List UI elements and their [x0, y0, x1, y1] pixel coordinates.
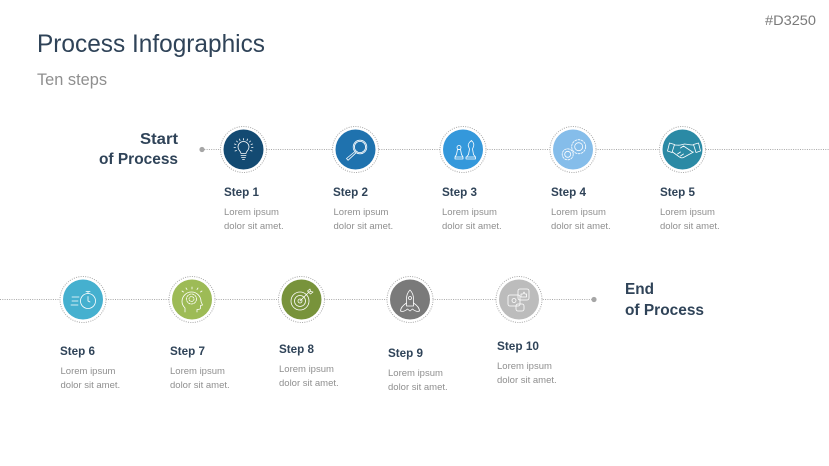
icon: light bulb	[234, 138, 253, 160]
step 1 text	[224, 207, 284, 232]
step 10	[496, 276, 557, 386]
heading: start of process	[99, 131, 179, 168]
heading: end of process: End	[625, 281, 654, 298]
step 8 text: Lorem ipsum	[279, 364, 334, 375]
step 5 text	[660, 207, 720, 232]
step 3 label: Step 3	[442, 185, 477, 199]
step 2 label: Step 2	[333, 185, 368, 199]
step 5	[660, 126, 720, 232]
step 7 text: dolor sit amet.	[170, 380, 230, 391]
step 5 label: Step 5	[660, 185, 695, 199]
step 9 text: Lorem ipsum	[388, 368, 443, 379]
step 8	[278, 276, 339, 389]
timeline: first row	[199, 147, 829, 152]
step 6 text	[60, 366, 120, 391]
step 3 text	[442, 207, 502, 232]
title: Process Infographics	[37, 30, 265, 58]
heading: start of process: of Process	[99, 151, 178, 168]
step 3 text: dolor sit amet.	[442, 221, 502, 232]
step 8 label: Step 8	[279, 342, 314, 356]
step 7 text	[170, 366, 230, 391]
step 6 text: Lorem ipsum	[60, 366, 115, 377]
step 2 text: Lorem ipsum	[334, 207, 388, 218]
step 7 text: Lorem ipsum	[170, 366, 225, 377]
step 10 label: Step 10	[497, 339, 539, 353]
step 7 label: Step 7	[170, 344, 205, 358]
step 5 text: dolor sit amet.	[660, 221, 720, 232]
icon: head with idea	[182, 287, 202, 312]
step 9 text	[388, 368, 448, 393]
step 1 text: Lorem ipsum	[224, 207, 279, 218]
step 2	[332, 126, 393, 232]
heading: end of process: of Process	[625, 302, 704, 319]
step 4	[550, 126, 611, 232]
icon: handshake	[668, 143, 700, 158]
icon: chess pieces	[455, 140, 476, 159]
step 9 label: Step 9	[388, 346, 423, 360]
step 6 text: dolor sit amet.	[60, 380, 120, 391]
step 6 label: Step 6	[60, 344, 95, 358]
icon: gears	[562, 140, 586, 160]
step 9	[387, 276, 448, 393]
icon: rocket	[400, 290, 420, 311]
step 8 text	[279, 364, 339, 389]
step 10 text	[497, 361, 557, 386]
step 10 text: dolor sit amet.	[497, 375, 557, 386]
step 2 text: dolor sit amet.	[334, 221, 393, 232]
timeline: second row	[0, 297, 597, 302]
icon: feedback bubbles	[508, 289, 529, 311]
step 4 text: Lorem ipsum	[551, 207, 606, 218]
step 3 text: Lorem ipsum	[442, 207, 497, 218]
subtitle: Ten steps	[37, 71, 107, 89]
step 6	[60, 276, 120, 391]
document code: #D3250	[765, 13, 816, 28]
icon: stopwatch	[71, 292, 96, 308]
icon: target	[291, 289, 313, 310]
icon: magnifier	[346, 140, 367, 160]
step 3	[440, 126, 502, 232]
step 8 text: dolor sit amet.	[279, 378, 339, 389]
step 4 label: Step 4	[551, 185, 586, 199]
step 1	[220, 126, 284, 232]
step 4 text: dolor sit amet.	[551, 221, 611, 232]
heading: start of process: Start	[140, 131, 179, 148]
step 7	[169, 276, 230, 391]
step 5 text: Lorem ipsum	[660, 207, 715, 218]
step 2 text	[334, 207, 393, 232]
step 10 text: Lorem ipsum	[497, 361, 552, 372]
step 1 text: dolor sit amet.	[224, 221, 284, 232]
step 4 text	[551, 207, 611, 232]
step 1 label: Step 1	[224, 185, 259, 199]
heading: end of process	[625, 281, 704, 319]
step 9 text: dolor sit amet.	[388, 382, 448, 393]
